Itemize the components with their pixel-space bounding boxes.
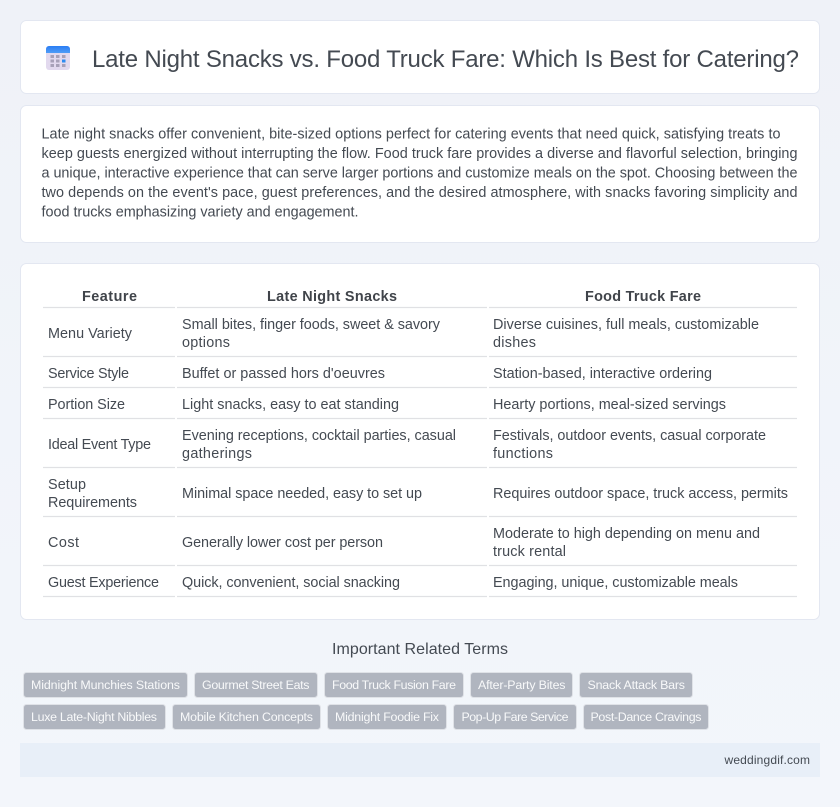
text block: introduction paragraph: keep guests energized without interrupting the flow. Food truck fare provides a diverse and flavorful selection, bringing xyxy=(42,146,798,162)
row: cost xyxy=(48,526,760,560)
table header row: Feature xyxy=(82,289,137,305)
tags: related terms: Food Truck Fusion Fare xyxy=(332,678,456,692)
row: menu variety xyxy=(48,317,759,351)
row: service style: Buffet or passed hors d'oeuvres xyxy=(182,366,385,382)
row: portion size: Hearty portions, meal-sized servings xyxy=(493,397,726,413)
table header row xyxy=(82,289,701,305)
tags: related terms: Mobile Kitchen Concepts xyxy=(180,710,313,724)
row: guest experience: Engaging, unique, customizable meals xyxy=(493,575,738,591)
row: guest experience: Quick, convenient, social snacking xyxy=(182,575,400,591)
text block: introduction paragraph: two depends on the event's pace, guest preferences, and the desired atmosphere, with snacks favoring simplicity and xyxy=(42,185,798,201)
row: cost: truck rental xyxy=(493,544,566,560)
panel: introduction xyxy=(20,106,820,242)
row: portion size: Portion Size xyxy=(48,397,125,413)
tags: related terms: Midnight Foodie Fix xyxy=(335,710,440,724)
row: setup requirements xyxy=(48,477,788,511)
row: guest experience: Guest Experience xyxy=(48,575,159,591)
tags: related terms: Luxe Late-Night Nibbles xyxy=(31,710,157,724)
table header row: Food Truck Fare xyxy=(585,289,701,305)
row: ideal event type: Evening receptions, cocktail parties, casual xyxy=(182,428,456,444)
title: Late Night Snacks vs. Food Truck Fare: Which Is Best for Catering? xyxy=(92,46,799,73)
row: setup requirements: Requires outdoor space, truck access, permits xyxy=(493,486,788,502)
row: menu variety: options xyxy=(182,335,230,351)
row: service style: Service Style xyxy=(48,366,129,382)
row: portion size xyxy=(48,397,726,413)
row: menu variety: Small bites, finger foods, sweet & savory xyxy=(182,317,441,333)
tags: related terms: After-Party Bites xyxy=(478,678,566,692)
row: guest experience xyxy=(48,575,738,591)
tags: related terms: Gourmet Street Eats xyxy=(202,678,310,692)
row: cost: Generally lower cost per person xyxy=(182,535,383,551)
row: setup requirements: Minimal space needed, easy to set up xyxy=(182,486,422,502)
text block: introduction paragraph: food trucks emphasizing variety and engagement. xyxy=(42,204,358,220)
footer bar xyxy=(20,743,820,777)
icon: calendar xyxy=(46,46,70,70)
row: portion size: Light snacks, easy to eat standing xyxy=(182,397,399,413)
tags: related terms: Pop-Up Fare Service xyxy=(462,710,569,724)
row: ideal event type: Ideal Event Type xyxy=(48,437,151,453)
text block: introduction paragraph: a unique, interactive experience that can serve larger portions and customize meals on the spot. Choosing between the xyxy=(42,166,798,182)
row: menu variety: Menu Variety xyxy=(48,326,133,342)
row: service style: Station-based, interactive ordering xyxy=(493,366,712,382)
row: ideal event type xyxy=(48,428,766,462)
row: service style xyxy=(48,366,712,382)
table grid lines xyxy=(43,308,797,596)
heading: important related terms: Important Related Terms xyxy=(332,641,508,658)
row: cost: Moderate to high depending on menu and xyxy=(493,526,760,542)
footer source text: weddingdif.com xyxy=(724,753,810,767)
row: ideal event type: Festivals, outdoor events, casual corporate xyxy=(493,428,766,444)
text block: introduction paragraph xyxy=(42,126,798,220)
panel: title header xyxy=(20,20,820,94)
row: menu variety: Diverse cuisines, full meals, customizable xyxy=(493,317,759,333)
tags: related terms: Post-Dance Cravings xyxy=(590,710,702,724)
row: setup requirements: Requirements xyxy=(48,495,137,511)
tags: related terms: Midnight Munchies Stations xyxy=(31,678,180,692)
panel: comparison table xyxy=(20,264,820,620)
row: setup requirements: Setup xyxy=(48,477,86,493)
row: ideal event type: gatherings xyxy=(182,446,252,462)
table header row: Late Night Snacks xyxy=(267,289,397,305)
tags: related terms: Snack Attack Bars xyxy=(588,678,685,692)
tags: related terms xyxy=(24,672,708,730)
row: ideal event type: functions xyxy=(493,446,553,462)
text block: introduction paragraph: Late night snacks offer convenient, bite-sized options perfect for catering events that need quick, satisfying treats to xyxy=(42,126,780,142)
row: cost: Cost xyxy=(48,535,79,551)
row: menu variety: dishes xyxy=(493,335,536,351)
